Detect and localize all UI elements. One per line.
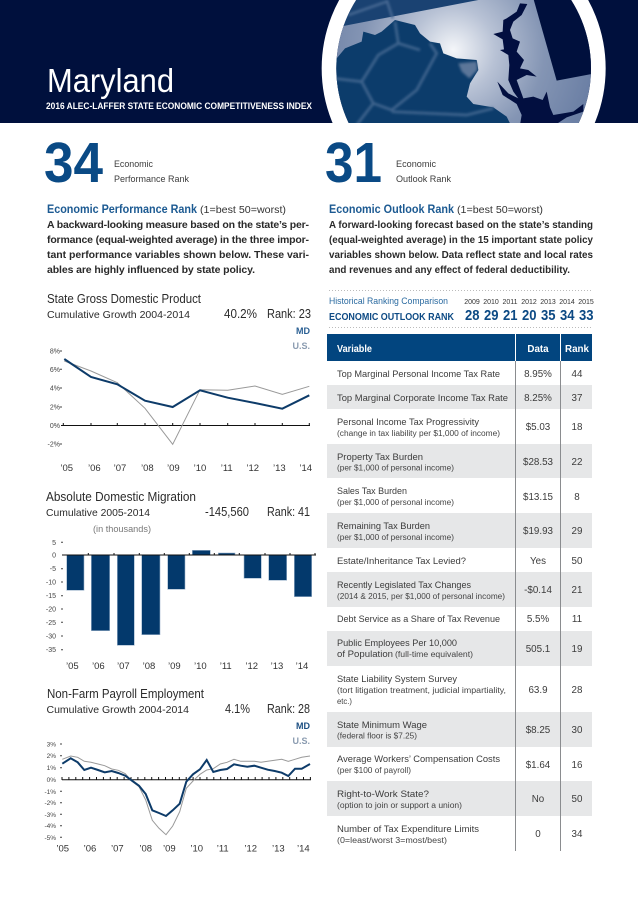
chart: state gross domestic product: 4%: [50, 386, 60, 392]
table header: Rank: [565, 344, 590, 355]
row: recent tax changes: 21: [572, 585, 582, 596]
chart: absolute domestic migration: -30: [46, 634, 56, 640]
row: public employees: [337, 638, 582, 660]
chart: state gross domestic product: 0%: [50, 423, 60, 430]
chart: absolute domestic migration: ’09: [168, 661, 181, 672]
chart: state gross domestic product: ’11: [221, 463, 233, 474]
row: property tax burden: (per $1,000 of personal income): [337, 464, 454, 472]
chart: state gross domestic product: 2%: [50, 404, 60, 412]
chart: state gross domestic product: Rank: 23: [267, 307, 311, 321]
row: public employees: 505.1: [526, 644, 550, 655]
row: workers compensation: 16: [572, 760, 583, 771]
chart: absolute domestic migration: -25: [46, 620, 56, 627]
row: minimum wage: $8.25: [526, 725, 551, 736]
row: recent tax changes: [337, 580, 582, 601]
row: public employees: 19: [572, 644, 582, 655]
row: corporate income tax rate: 37: [572, 393, 582, 404]
chart: absolute domestic migration: ’14: [296, 661, 308, 672]
row: liability survey: 28: [572, 685, 583, 696]
outlook rank description: A forward-looking forecast based on the state’s standing: [329, 219, 593, 231]
chart: non-farm payroll employment: 4.1%: [225, 702, 250, 716]
chart: absolute domestic migration: (in thousands): [93, 524, 151, 534]
outlook rank description: (equal-weighted average) in the 15 important state policy: [329, 234, 593, 246]
historical ranking comparison: ECONOMIC OUTLOOK RANK: [329, 311, 454, 323]
historical ranking comparison: 21: [503, 307, 518, 324]
chart: absolute domestic migration: ’12: [245, 661, 258, 672]
chart: non-farm payroll employment: U.S.: [292, 736, 310, 746]
row: minimum wage: 30: [572, 725, 583, 736]
row: debt service: [337, 614, 582, 625]
row: minimum wage: State Minimum Wage: [337, 720, 427, 731]
row: debt service: 11: [572, 614, 582, 625]
row: tax progressivity: (change in tax liability per $1,000 of income): [337, 429, 500, 438]
row: tax progressivity: $5.03: [526, 422, 551, 433]
chart: non-farm payroll employment: 3%: [47, 742, 56, 748]
performance rank number: 34: [44, 131, 103, 195]
row: tax progressivity: [337, 417, 583, 438]
row: recent tax changes: -$0.14: [524, 585, 552, 596]
chart: absolute domestic migration: ’13: [271, 661, 283, 672]
row: remaining tax burden: (per $1,000 of personal income): [337, 533, 454, 542]
chart: non-farm payroll employment: -4%: [44, 823, 56, 830]
chart: state gross domestic product: U.S.: [292, 341, 310, 351]
historical ranking comparison: 29: [484, 307, 498, 324]
chart: non-farm payroll employment: ’14: [297, 844, 310, 855]
historical ranking comparison: 28: [465, 307, 480, 324]
table: outlook variables: [327, 334, 592, 851]
chart: non-farm payroll employment: -1%: [44, 789, 56, 796]
performance rank description: [47, 204, 310, 276]
table header: Data: [527, 344, 549, 355]
outlook rank number: 31: [325, 131, 382, 195]
row: property tax burden: [337, 452, 582, 472]
chart: non-farm payroll employment: Cumulative Growth 2004-2014: [46, 704, 189, 716]
outlook rank description: [329, 204, 593, 276]
row: property tax burden: 22: [572, 457, 582, 468]
row: remaining tax burden: $19.93: [523, 526, 554, 537]
row: corporate income tax rate: 8.25%: [524, 393, 552, 404]
row: liability survey: 63.9: [528, 685, 548, 696]
performance rank description: ables are highly influenced by state policy.: [47, 264, 255, 276]
chart: absolute domestic migration: -10: [46, 580, 56, 586]
chart: absolute domestic migration: [46, 490, 316, 672]
row: sales tax burden: 8: [574, 492, 580, 503]
row: property tax burden: $28.53: [523, 457, 554, 468]
row: personal income tax rate: 8.95%: [524, 369, 552, 380]
chart: non-farm payroll employment: -2%: [44, 800, 56, 807]
historical ranking comparison: Historical Ranking Comparison: [329, 296, 448, 307]
chart: absolute domestic migration: ’07: [117, 661, 130, 672]
table header: [327, 334, 592, 361]
chart: non-farm payroll employment: ’12: [244, 844, 257, 855]
chart: non-farm payroll employment: ’05: [56, 844, 69, 855]
outlook rank description: (1=best 50=worst): [457, 205, 543, 216]
row: tax progressivity: 18: [572, 422, 583, 433]
chart: state gross domestic product: 6%: [50, 367, 60, 374]
row: personal income tax rate: Top Marginal Personal Income Tax Rate: [337, 369, 500, 380]
row: tax expenditure limits: [337, 824, 583, 845]
row: estate tax: Estate/Inheritance Tax Levied?: [337, 556, 466, 567]
chart: state gross domestic product: -2%: [48, 442, 60, 448]
chart: non-farm payroll employment: ’11: [217, 844, 229, 855]
row: workers compensation: (per $100 of payroll): [337, 766, 411, 775]
row: liability survey: State Liability System Survey: [337, 674, 457, 685]
historical ranking comparison: 2014: [559, 299, 575, 306]
row: right to work: Right-to-Work State?: [337, 789, 429, 800]
chart: absolute domestic migration: -15: [46, 593, 56, 600]
chart: state gross domestic product: ’07: [114, 463, 126, 474]
row: remaining tax burden: Remaining Tax Burden: [337, 521, 430, 532]
map medallion of Maryland: [322, 0, 606, 123]
chart: state gross domestic product: Cumulative Growth 2004-2014: [47, 309, 190, 321]
performance rank number: Performance Rank: [114, 174, 189, 185]
row: liability survey: [337, 674, 583, 706]
chart: absolute domestic migration: -5: [50, 566, 56, 573]
row: recent tax changes: Recently Legislated Tax Changes: [337, 580, 471, 591]
chart: non-farm payroll employment: 2%: [47, 753, 56, 760]
performance rank description: (1=best 50=worst): [200, 205, 286, 216]
chart: non-farm payroll employment: -5%: [44, 835, 56, 842]
historical ranking comparison: 34: [560, 307, 575, 324]
chart: non-farm payroll employment: MD: [296, 721, 310, 731]
row: tax expenditure limits: (0=least/worst 3=most/best): [337, 836, 447, 845]
outlook rank number: Outlook Rank: [396, 174, 451, 185]
historical ranking comparison: [329, 290, 594, 328]
chart: non-farm payroll employment: [44, 687, 311, 855]
outlook rank description: variables shown below. Data reflect state and local rates: [329, 249, 593, 261]
table header: Variable: [337, 344, 373, 355]
row: tax expenditure limits: 34: [572, 829, 583, 840]
row: sales tax burden: (per $1,000 of personal income): [337, 498, 454, 507]
row: public employees: of Population: [337, 649, 393, 660]
performance rank description: formance (equal-weighted average) in the three impor-: [47, 234, 310, 246]
row: debt service: 5.5%: [527, 614, 549, 625]
performance rank number: Economic: [114, 159, 153, 170]
chart: non-farm payroll employment: ’13: [272, 844, 285, 855]
row: tax progressivity: Personal Income Tax Progressivity: [337, 417, 479, 428]
historical ranking comparison: 33: [579, 307, 594, 324]
row: estate tax: [337, 556, 583, 567]
row: estate tax: 50: [572, 556, 583, 567]
row: liability survey: etc.): [337, 697, 352, 706]
performance rank description: Economic Performance Rank: [47, 204, 198, 216]
chart: state gross domestic product: ’14: [299, 463, 312, 474]
chart: non-farm payroll employment: Non-Farm Payroll Employment: [47, 687, 204, 701]
outlook rank description: and revenues and any effect of federal deductibility.: [329, 264, 570, 276]
historical ranking comparison: 20: [522, 307, 536, 324]
row: minimum wage: [337, 720, 583, 740]
historical ranking comparison: 2013: [540, 299, 556, 306]
chart: non-farm payroll employment: 0%: [47, 777, 56, 784]
chart: non-farm payroll employment: ’06: [84, 844, 96, 855]
chart: state gross domestic product: ’12: [246, 463, 259, 474]
chart: absolute domestic migration: ’11: [220, 661, 232, 672]
historical ranking comparison: 2012: [521, 299, 537, 306]
chart: state gross domestic product: ’09: [167, 463, 180, 474]
chart: non-farm payroll employment: ’09: [163, 844, 176, 855]
row: right to work: [337, 789, 583, 810]
row: property tax burden: Property Tax Burden: [337, 452, 423, 463]
historical ranking comparison: 2015: [578, 299, 594, 306]
chart: state gross domestic product: [47, 292, 312, 474]
chart: absolute domestic migration: -35: [46, 647, 56, 654]
chart: state gross domestic product: State Gross Domestic Product: [47, 292, 201, 306]
performance rank description: tant performance variables shown below. These vari-: [47, 249, 310, 261]
chart: absolute domestic migration: 5: [52, 540, 56, 547]
title: Maryland: [47, 62, 174, 99]
row: public employees: Public Employees Per 10,000: [337, 638, 457, 649]
performance rank description: A backward-looking measure based on the state’s per-: [47, 219, 310, 231]
chart: non-farm payroll employment: -3%: [44, 812, 56, 819]
row: workers compensation: [337, 754, 583, 775]
chart: absolute domestic migration: -145,560: [205, 505, 249, 519]
row: public employees: (full-time equivalent): [395, 650, 473, 659]
row: recent tax changes: (2014 & 2015, per $1,000 of personal income): [337, 592, 505, 601]
row: personal income tax rate: [337, 369, 583, 380]
row: sales tax burden: $13.15: [523, 492, 554, 503]
row: tax expenditure limits: Number of Tax Expenditure Limits: [337, 824, 479, 835]
row: remaining tax burden: [337, 521, 582, 542]
chart: state gross domestic product: ’05: [60, 463, 73, 474]
row: remaining tax burden: 29: [572, 526, 582, 537]
row: right to work: (option to join or support a union): [337, 801, 462, 810]
row: corporate income tax rate: Top Marginal Corporate Income Tax Rate: [337, 393, 508, 404]
outlook rank number: [325, 131, 451, 195]
row: tax expenditure limits: 0: [535, 829, 541, 840]
outlook rank description: Economic Outlook Rank: [329, 204, 455, 216]
chart: state gross domestic product: ’10: [194, 463, 206, 474]
chart: absolute domestic migration: -20: [46, 606, 56, 614]
row: estate tax: Yes: [530, 556, 546, 567]
chart: state gross domestic product: 8%: [50, 348, 60, 356]
chart: state gross domestic product: MD: [296, 326, 310, 336]
row: workers compensation: $1.64: [526, 760, 551, 771]
chart: state gross domestic product: ’08: [141, 463, 154, 474]
chart: state gross domestic product: 40.2%: [224, 307, 257, 321]
row: minimum wage: (federal floor is $7.25): [337, 732, 417, 740]
historical ranking comparison: 2010: [483, 299, 499, 306]
historical ranking comparison: 2011: [502, 299, 518, 306]
chart: non-farm payroll employment: 1%: [47, 765, 56, 772]
chart: non-farm payroll employment: Rank: 28: [267, 702, 310, 716]
chart: non-farm payroll employment: ’07: [111, 844, 124, 855]
chart: state gross domestic product: ’13: [273, 463, 286, 474]
chart: absolute domestic migration: Cumulative 2005-2014: [46, 507, 150, 519]
row shading: [327, 385, 592, 816]
subtitle: 2016 ALEC-LAFFER STATE ECONOMIC COMPETITIVENESS INDEX: [46, 101, 313, 112]
chart: absolute domestic migration: Rank: 41: [267, 505, 310, 519]
row: sales tax burden: [337, 486, 580, 507]
chart: absolute domestic migration: Absolute Domestic Migration: [46, 490, 196, 504]
chart: absolute domestic migration: ’08: [143, 661, 155, 672]
row: personal income tax rate: 44: [572, 369, 583, 380]
row: right to work: No: [532, 794, 545, 805]
historical ranking comparison: 35: [541, 307, 556, 324]
historical ranking comparison: 2009: [464, 299, 480, 306]
header banner: [0, 0, 638, 123]
row: debt service: Debt Service as a Share of Tax Revenue: [337, 614, 500, 625]
row: liability survey: (tort litigation treatment, judicial impartiality,: [337, 686, 506, 695]
chart: absolute domestic migration: 0: [52, 552, 56, 560]
chart: state gross domestic product: ’06: [88, 463, 101, 474]
chart: non-farm payroll employment: ’08: [139, 844, 152, 855]
chart: absolute domestic migration: ’05: [66, 661, 79, 672]
performance rank number: [44, 131, 189, 195]
outlook rank number: Economic: [396, 159, 436, 170]
chart: non-farm payroll employment: ’10: [190, 844, 203, 855]
chart: absolute domestic migration: ’10: [194, 661, 207, 672]
chart: absolute domestic migration: ’06: [92, 661, 105, 672]
row: right to work: 50: [572, 794, 583, 805]
row: workers compensation: Average Workers’ Compensation Costs: [337, 754, 500, 765]
row: sales tax burden: Sales Tax Burden: [337, 486, 407, 497]
